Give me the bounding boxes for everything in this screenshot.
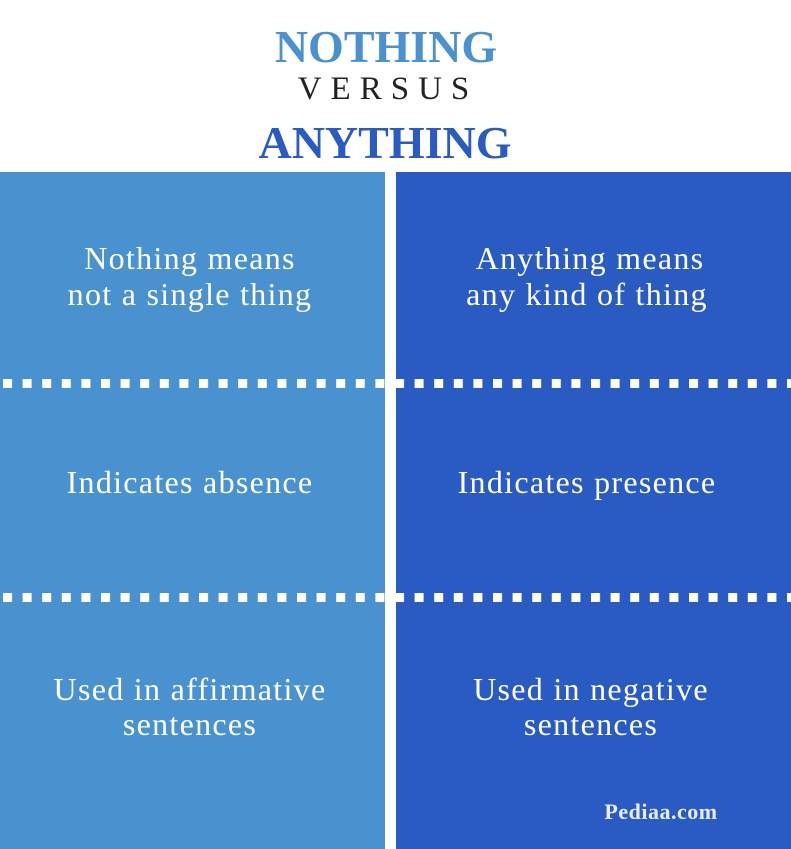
text: nothing definition: not a single thing — [68, 276, 312, 312]
panel: nothing — [0, 172, 385, 849]
logo: Pediaa.com — [604, 799, 718, 824]
text: affirmative: Used in affirmative — [54, 671, 326, 707]
title — [258, 21, 512, 168]
text: nothing definition: Nothing means — [84, 240, 296, 276]
text: negative: sentences — [524, 706, 658, 742]
text: absence: Indicates absence — [67, 464, 313, 500]
title: ANYTHING — [258, 117, 512, 168]
title: VERSUS — [298, 71, 478, 107]
text: negative: Used in negative — [473, 671, 709, 707]
text: anything definition: any kind of thing — [466, 276, 708, 312]
text: presence: Indicates presence — [458, 464, 716, 500]
text: affirmative: sentences — [123, 706, 257, 742]
panel: anything — [396, 172, 791, 849]
title: NOTHING — [275, 21, 497, 72]
text: anything definition: Anything means — [476, 240, 704, 276]
